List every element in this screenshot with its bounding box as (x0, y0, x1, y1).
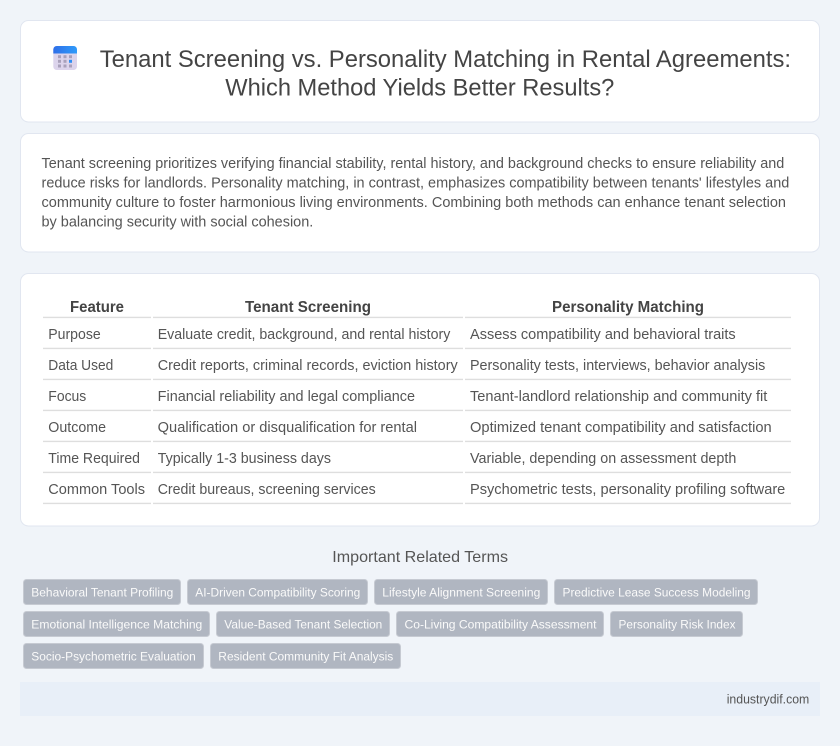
row: time required (48, 451, 736, 467)
icon: calendar (53, 46, 77, 70)
row: focus: Tenant-landlord relationship and community fit (470, 389, 767, 405)
row: common tools (48, 482, 785, 498)
summary paragraph: by balancing security with social cohesion. (42, 214, 313, 230)
tag (216, 612, 390, 636)
table header: Personality Matching (552, 299, 704, 316)
row: data used (48, 358, 765, 374)
heading: related terms: Important Related Terms (332, 549, 508, 566)
row: time required: Variable, depending on assessment depth (470, 451, 736, 467)
row: focus (48, 389, 767, 405)
row: common tools: Credit bureaus, screening services (158, 482, 376, 498)
tag (554, 580, 758, 604)
tag: Resident Community Fit Analysis (218, 649, 393, 663)
title (100, 46, 791, 102)
row: data used: Personality tests, interviews, behavior analysis (470, 358, 765, 374)
row: time required: Time Required (48, 451, 140, 467)
tag list (24, 580, 758, 668)
tag (610, 612, 742, 636)
summary paragraph (42, 156, 789, 230)
row: outcome: Qualification or disqualification for rental (158, 420, 417, 436)
row: common tools: Psychometric tests, personality profiling software (470, 482, 785, 498)
row: data used: Data Used (48, 358, 113, 374)
row: time required: Typically 1-3 business days (158, 451, 331, 467)
row: data used: Credit reports, criminal records, eviction history (158, 358, 458, 374)
row: purpose (48, 327, 736, 343)
tag: Co-Living Compatibility Assessment (404, 617, 597, 631)
title: Tenant Screening vs. Personality Matching in Rental Agreements: (100, 46, 791, 73)
table header: Feature (70, 299, 124, 316)
summary paragraph: reduce risks for landlords. Personality matching, in contrast, emphasizes compatibility between tenants' lifestyles and (42, 175, 789, 191)
tag: Personality Risk Index (618, 617, 736, 631)
tag (210, 644, 400, 668)
row: outcome: Outcome (48, 420, 106, 436)
footer (20, 682, 820, 716)
tag: Value-Based Tenant Selection (224, 617, 382, 631)
tag: Emotional Intelligence Matching (31, 617, 202, 631)
tag (374, 580, 548, 604)
tag: Behavioral Tenant Profiling (31, 585, 173, 599)
row: purpose: Purpose (48, 327, 101, 343)
tag: AI-Driven Compatibility Scoring (195, 585, 360, 599)
footer: industrydif.com (727, 692, 809, 706)
tag (396, 612, 604, 636)
row: focus: Focus (48, 389, 86, 405)
row: focus: Financial reliability and legal compliance (158, 389, 415, 405)
row: purpose: Evaluate credit, background, and rental history (158, 327, 451, 343)
tag (188, 580, 368, 604)
row: purpose: Assess compatibility and behavioral traits (470, 327, 736, 343)
tag: Predictive Lease Success Modeling (562, 585, 750, 599)
tag: Socio-Psychometric Evaluation (31, 649, 196, 663)
tag: Lifestyle Alignment Screening (382, 585, 540, 599)
row: outcome (48, 420, 772, 436)
title: Which Method Yields Better Results? (225, 74, 614, 102)
panel: comparison table (20, 274, 820, 526)
panel: header (20, 20, 820, 122)
panel: summary (20, 134, 820, 252)
tag (24, 580, 180, 604)
table header (70, 299, 704, 316)
table header: Tenant Screening (245, 299, 371, 316)
tag (24, 644, 204, 668)
summary paragraph: Tenant screening prioritizes verifying financial stability, rental history, and background checks to ensure reliability and (42, 156, 784, 172)
row: common tools: Common Tools (48, 482, 145, 498)
summary paragraph: community culture to foster harmonious living environments. Combining both methods can enhance tenant selection (42, 195, 786, 211)
row: outcome: Optimized tenant compatibility and satisfaction (470, 420, 772, 436)
tag (24, 612, 210, 636)
